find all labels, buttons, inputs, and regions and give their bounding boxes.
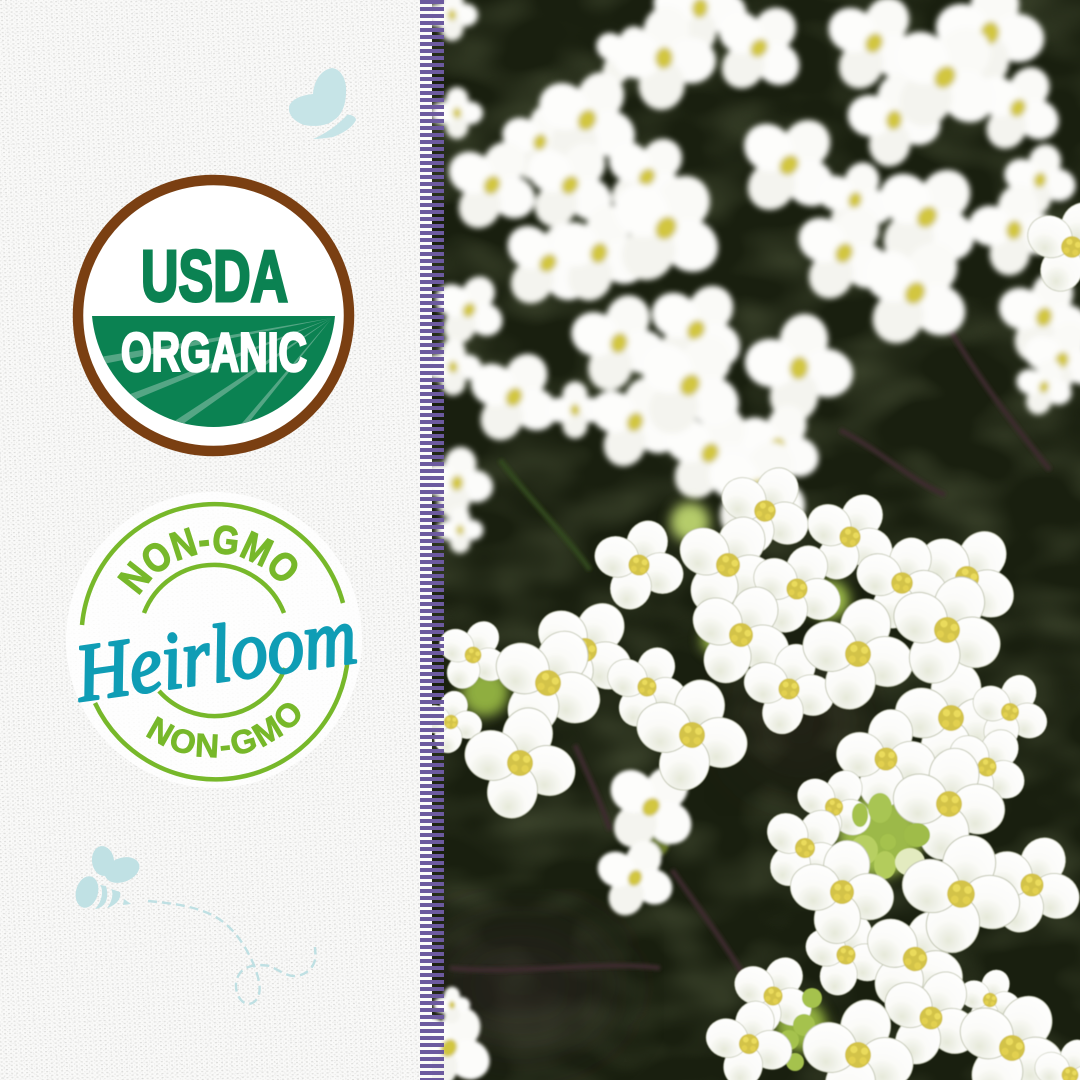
- script wordmark: Heirloom: Heirloom: [69, 590, 362, 719]
- buds: green clusters: [461, 502, 922, 1052]
- decorative stripe band: purple border: [420, 0, 444, 1080]
- badge: Non-GMO Heirloom seal: [66, 492, 362, 788]
- flight path: [148, 901, 315, 1004]
- outer and inner arcs: [82, 504, 348, 779]
- flower cluster: mid left, soft focus: [432, 766, 694, 1080]
- background: linen texture panel: [0, 0, 420, 1080]
- buds: central bud cluster: [850, 793, 930, 879]
- curved text: NON-GMO bottom: NON-GMO: [146, 703, 300, 758]
- field rays: [103, 318, 331, 424]
- photo: white alyssum flowers: [389, 0, 1080, 1080]
- icon: bee with dashed flight path: [72, 845, 315, 1004]
- ORGANIC wordmark: ORGANIC: [121, 321, 307, 383]
- curved text: NON-GMO top: NON-GMO: [117, 525, 298, 595]
- USDA wordmark: USDA: [141, 237, 288, 317]
- stems: [450, 330, 1050, 990]
- icon: butterfly: [289, 68, 356, 139]
- badge: USDA Organic seal: [78, 180, 349, 451]
- flower cluster: top, blurred: [415, 0, 1080, 561]
- green field half circle: [92, 316, 335, 427]
- out-of-focus foliage: [430, 0, 1080, 1080]
- buds: lower bud cluster: [779, 988, 822, 1071]
- flower cluster: large sharp foreground: [415, 185, 1080, 1080]
